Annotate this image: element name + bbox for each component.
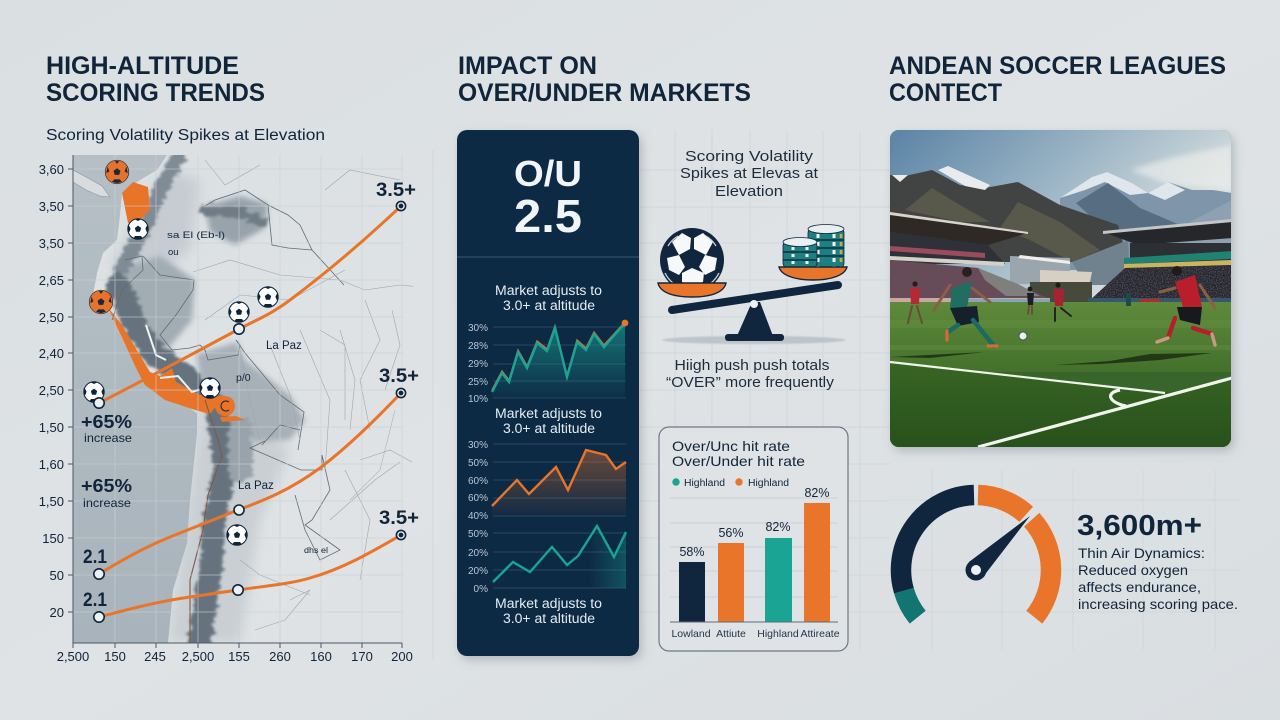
y axis labels: 50: [50, 568, 64, 583]
line chart: orange and teal: 40%: [468, 511, 488, 522]
line chart: orange and teal: 0%: [474, 584, 488, 595]
y axis labels: 20: [50, 605, 64, 620]
left pan: [658, 283, 726, 297]
cloud: [1130, 145, 1232, 190]
trend line 2: [99, 393, 401, 574]
chip stacks: [783, 224, 844, 268]
line chart: teal market trend: 10%: [468, 394, 488, 405]
bar values: 82%: [765, 520, 791, 534]
bar values: 82%: [804, 486, 830, 500]
x axis labels: 2,500: [182, 649, 214, 664]
data point markers: [94, 201, 406, 622]
line chart: teal market trend: 25%: [468, 377, 488, 388]
value labels: 2.1: [83, 590, 107, 611]
near mountains: [890, 170, 1125, 262]
line chart: teal market trend: [468, 320, 628, 405]
bars: [679, 503, 830, 622]
map place labels: ou: [168, 247, 179, 258]
gauge: altitude meter: [901, 495, 1051, 617]
text: thin air dynamics: affects endurance,: [1078, 579, 1201, 595]
x axis labels: [57, 649, 413, 664]
text: thin air dynamics: Thin Air Dynamics:: [1078, 545, 1205, 561]
text: push totals: [666, 357, 835, 391]
text: market adjusts top: 3.0+ at altitude: [503, 298, 595, 313]
bar values: 58%: [679, 545, 705, 559]
line chart: orange and teal: 60%: [468, 493, 488, 504]
map place labels: La Paz: [266, 340, 302, 352]
x axis labels: 170: [351, 649, 373, 664]
callout: +65% increase: [81, 412, 132, 445]
chart grid: [73, 155, 403, 643]
text: market adjusts middle: Market adjusts to: [495, 406, 602, 421]
chart axes: [68, 155, 402, 648]
pitch lines: [890, 362, 1165, 393]
y axis labels: 1,60: [39, 457, 64, 472]
bar labels: Lowland: [671, 628, 711, 640]
match ball: [1019, 332, 1027, 340]
crowds: [1092, 265, 1231, 298]
line chart: orange and teal: [468, 440, 626, 595]
icon: balance scale with ball and chips: [658, 224, 847, 344]
text: market adjusts bottom: Market adjusts to: [495, 596, 602, 611]
y axis labels: 1,50: [39, 420, 64, 435]
line chart: teal market trend: 28%: [468, 341, 488, 352]
bar values: 56%: [718, 526, 744, 540]
x axis labels: 160: [310, 649, 332, 664]
text: market adjusts middle: 3.0+ at altitude: [503, 421, 595, 436]
line chart: teal market trend: 30%: [468, 323, 488, 334]
y axis labels: 3,60: [39, 162, 64, 177]
text: market adjusts bottom: 3.0+ at altitude: [503, 611, 595, 626]
chart title: Over/Under hit rate: [672, 453, 805, 469]
trend line 1: [99, 206, 401, 403]
players: background: [908, 281, 1131, 323]
text: scoring volatility: Elevation: [715, 183, 783, 200]
heading: andean soccer leagues context: CONTECT: [889, 79, 1002, 107]
heading: impact on over/under markets: [458, 52, 751, 107]
x axis labels: 260: [269, 649, 291, 664]
text: market adjusts top: [495, 283, 602, 313]
text: market adjusts middle: [495, 406, 602, 436]
subtitle: Scoring Volatility Spikes at Elevation: [46, 127, 325, 144]
soccer ball icons on the map: [84, 160, 278, 545]
panel: navy O/U markets: [457, 130, 639, 656]
y axis labels: 2,50: [39, 310, 64, 325]
legend: Highland: [748, 478, 789, 489]
x axis labels: 200: [391, 649, 413, 664]
callout: +65% increase: increase: [84, 431, 132, 445]
bar labels: Attireate: [800, 628, 840, 640]
center buildings: [1010, 256, 1070, 284]
y axis labels: 3,50: [39, 236, 64, 251]
player: red: [1157, 266, 1215, 345]
photo: stadium in the Andes: [890, 130, 1232, 447]
bar labels: Highland: [757, 628, 799, 640]
right stand: [1108, 222, 1231, 243]
legend: Highland: [684, 478, 725, 489]
value labels: 3.5+: [379, 508, 419, 529]
gauge needle: [966, 516, 1030, 580]
O/U 2.5 value: [514, 153, 582, 242]
callout: +65% increase second: [81, 476, 132, 510]
map place labels: [167, 230, 328, 555]
beam and fulcrum: [737, 302, 773, 336]
heading: high-altitude scoring trends: [46, 52, 265, 107]
line chart: orange and teal: 50%: [468, 458, 488, 469]
y axis labels: 3,50: [39, 199, 64, 214]
O/U 2.5 value: O/U: [514, 153, 582, 194]
value labels: 2.1: [83, 547, 107, 568]
bar labels: Attiute: [716, 628, 746, 640]
text: thin air dynamics: Reduced oxygen: [1078, 562, 1188, 578]
shadows: [890, 352, 1212, 365]
far mountains: [1060, 172, 1232, 270]
chart title: Over/Unc hit rate: [672, 438, 790, 454]
heading: high-altitude scoring trends: HIGH-ALTITUDE: [46, 52, 239, 80]
trend line 3: [99, 535, 401, 617]
x axis labels: 150: [104, 649, 126, 664]
line chart: orange and teal: 20%: [468, 548, 488, 559]
bar values: [679, 486, 830, 559]
text: market adjusts bottom: [495, 596, 602, 626]
text: push totals: “OVER” more frequently: [666, 374, 835, 391]
y axis labels: 1,50: [39, 494, 64, 509]
value labels: 3.5+: [379, 366, 419, 387]
panel: over/under hit rate bar chart: [659, 427, 848, 651]
heading: andean soccer leagues context: [889, 52, 1226, 107]
right pan: [779, 267, 847, 280]
x axis labels: 2,500: [57, 649, 89, 664]
y axis labels: 2,50: [39, 383, 64, 398]
O/U 2.5 value: 2.5: [514, 190, 582, 242]
map place labels: sa El (Eb-l): [167, 230, 225, 241]
text: scoring volatility: Spikes at Elevas at: [680, 165, 819, 182]
heading: high-altitude scoring trends: SCORING TRENDS: [46, 79, 265, 107]
y axis labels: 2,40: [39, 346, 64, 361]
stat: 3,600m+: 3,600m+: [1077, 510, 1202, 542]
text: scoring volatility: Scoring Volatility: [685, 148, 814, 165]
callout: +65% increase: +65%: [81, 412, 132, 432]
heading: andean soccer leagues context: ANDEAN SOCCER LEAGUES: [889, 52, 1226, 80]
x axis labels: 245: [144, 649, 166, 664]
heading: impact on over/under markets: IMPACT ON: [458, 52, 597, 80]
value labels: 3.5+: [376, 180, 416, 201]
line chart: orange and teal: 20%: [468, 566, 488, 577]
text: thin air dynamics: [1078, 545, 1238, 612]
x axis labels: 155: [228, 649, 250, 664]
map place labels: dhs el: [304, 545, 328, 555]
left stand: [890, 213, 1028, 245]
pitch: [890, 302, 1231, 372]
y axis labels: [39, 162, 64, 620]
line chart: orange and teal: 30%: [468, 440, 488, 451]
line chart: teal market trend: 29%: [468, 359, 488, 370]
panel: scoring trend map chart: [39, 155, 420, 664]
heading: impact on over/under markets: OVER/UNDER MARKETS: [458, 79, 751, 107]
borders and rivers: [112, 190, 344, 560]
map place labels: p/0: [236, 372, 251, 384]
icon: large soccer ball: [660, 228, 724, 292]
line chart: orange and teal: 50%: [468, 529, 488, 540]
map of South America: [73, 155, 420, 643]
y axis labels: 150: [42, 531, 64, 546]
legend: [672, 478, 789, 489]
text: market adjusts top: Market adjusts to: [495, 283, 602, 298]
y axis labels: 2,65: [39, 273, 64, 288]
line chart: orange and teal: 60%: [468, 476, 488, 487]
callout: +65% increase second: increase: [83, 496, 131, 510]
chart title: [672, 438, 805, 469]
text: thin air dynamics: increasing scoring pace.: [1078, 596, 1238, 612]
text: push totals: Hiigh push push totals: [674, 357, 830, 374]
map place labels: La Paz: [238, 480, 274, 492]
value labels: [83, 180, 419, 611]
text: scoring volatility: [680, 148, 819, 200]
callout: +65% increase second: +65%: [81, 476, 132, 496]
player: teal: [934, 267, 997, 346]
bar labels: [671, 628, 840, 640]
